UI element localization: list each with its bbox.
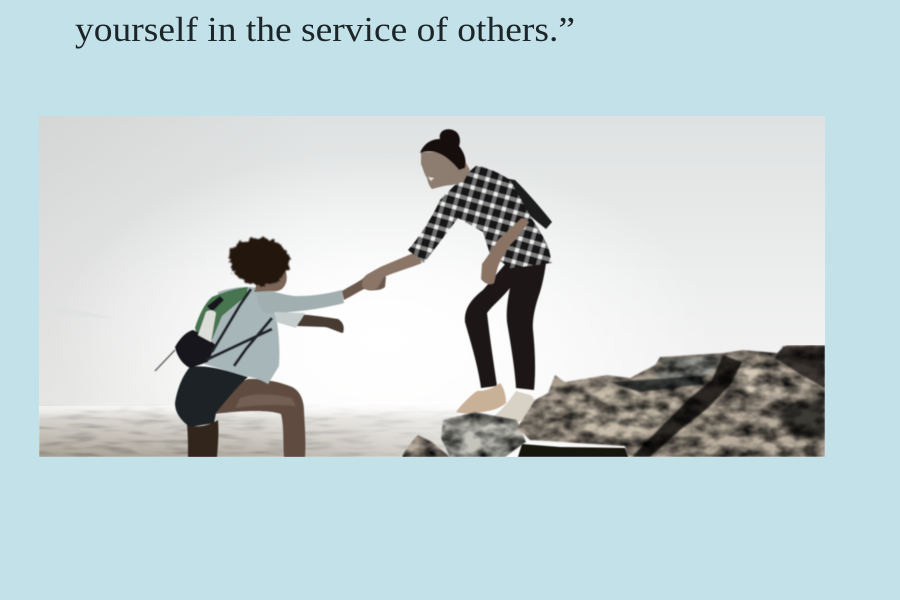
top rock ledge — [655, 355, 722, 380]
sun glow — [140, 200, 582, 415]
face and neck — [421, 152, 470, 189]
front grey rock — [441, 412, 526, 457]
backpack dark stripe — [207, 296, 224, 312]
backpack straps — [206, 289, 272, 366]
small left rock — [402, 435, 450, 457]
bottle — [198, 310, 216, 342]
rear leg — [187, 420, 218, 457]
far arm — [290, 314, 344, 333]
quote text: yourself in the service of others.” — [75, 10, 575, 49]
under sleeve — [275, 312, 305, 328]
photo: two hikers helping each other — [39, 116, 825, 457]
hydration tube — [155, 350, 175, 371]
outstretched forearm and hand — [362, 252, 422, 290]
sleeve — [257, 289, 344, 313]
dark top-right boulder — [775, 346, 825, 388]
near forearm and clasped hands — [342, 273, 386, 300]
hiker on the left — [155, 238, 386, 457]
sky shading on the left — [39, 116, 154, 406]
rocks — [402, 345, 825, 457]
hair and bun — [420, 129, 466, 170]
distant landscape — [39, 408, 458, 457]
leggings — [465, 252, 547, 390]
bent arm and hand — [481, 218, 529, 284]
left shoe — [456, 383, 506, 414]
shirt body — [204, 287, 279, 384]
backpack — [508, 178, 552, 230]
front leg — [214, 379, 305, 457]
sky — [39, 116, 825, 457]
infographic canvas — [39, 16, 825, 457]
thigh highlight — [235, 394, 296, 408]
right shoe — [494, 390, 535, 422]
backpack green panel — [195, 287, 248, 340]
shorts — [175, 366, 248, 427]
hair — [229, 238, 290, 285]
dark crack down the rock — [632, 355, 742, 457]
shadow gap under rock — [518, 444, 628, 457]
hiker on the right — [362, 129, 552, 426]
faint cloud — [39, 303, 112, 318]
sunlit faces — [535, 388, 680, 442]
shirt — [408, 165, 552, 268]
backpack lower pouch — [175, 330, 216, 368]
large rock — [517, 345, 825, 457]
neck and face — [254, 270, 288, 292]
smile — [428, 177, 434, 181]
dark right blotch — [775, 395, 825, 440]
